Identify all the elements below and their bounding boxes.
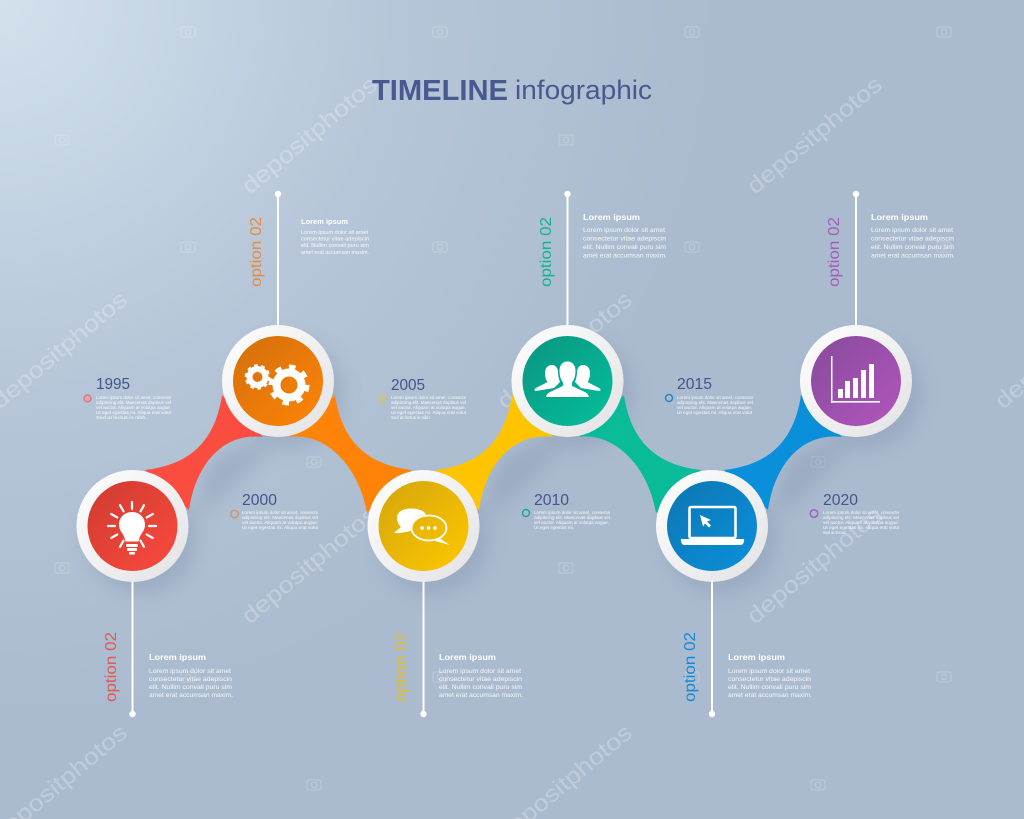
text block: top 3: Lorem ipsum — [871, 212, 928, 222]
text block: top 1: consectetur vitae adepiscin — [301, 236, 369, 242]
year block: 2005: 2005 — [391, 377, 425, 394]
option labels: option 02 — [826, 217, 843, 287]
text block: top 1: Lorem ipsum dolor sit amet — [301, 230, 368, 236]
icon: gears — [246, 366, 307, 403]
year block: 2005: Lorem ipsum dolor sit amet, consecte — [391, 395, 466, 401]
year block: 1995: Ut eget egestas mi. Aliqua erat volut — [96, 410, 172, 416]
text block: bottom 3: consectetur vitae adepiscin — [728, 676, 811, 683]
option labels: option 02 — [538, 217, 555, 287]
year block: 2000: Ut eget egestas mi. Aliqua erat volut — [242, 525, 319, 531]
option labels: option 02 — [248, 217, 265, 287]
shadows — [86, 337, 922, 594]
year block: 2005: Sed at lectus in nibh. — [391, 415, 431, 421]
year block: 1995: adipiscing elit. Maecenas dapibus vel — [96, 400, 171, 406]
year block: 2000: adipiscing elit. Maecenas dapibus vel — [242, 515, 318, 521]
icon: people — [534, 361, 600, 398]
year block: 1995 — [84, 376, 172, 421]
year block: 2015: Lorem ipsum dolor sit amet, consecte — [677, 395, 753, 401]
node 6: bar chart — [800, 325, 912, 437]
year block: 2015 — [666, 376, 753, 416]
year block: 2010: adipiscing elit. Maecenas dapibus vel — [534, 515, 610, 521]
connector: teal — [579, 395, 701, 513]
year block: 2005: adipiscing elit. Maecenas dapibus vel — [391, 400, 466, 406]
year block: 2010 — [522, 492, 610, 531]
year block: 2010: vel auctor. Aliquam at volutpa augue. — [534, 520, 609, 526]
year block: 1995: 1995 — [96, 376, 130, 393]
year block: 1995: Sed at lectus in nibh. — [96, 415, 147, 421]
year block: 2000 — [231, 492, 319, 531]
connector: orange — [290, 395, 412, 513]
year block: 2010: Ut eget egestas mi. — [534, 525, 574, 531]
year block: 2005 — [377, 377, 467, 421]
text block: bottom 1: elit. Nullim convali puru sim — [149, 684, 233, 691]
icon: bar chart — [831, 356, 880, 403]
text block: top 3: Lorem ipsum dolor sit amet — [871, 227, 953, 234]
text block: bottom 3: Lorem ipsum dolor sit amet — [728, 668, 810, 675]
text block: bottom 2: Lorem ipsum — [439, 652, 496, 662]
text block: bottom 1 — [149, 652, 233, 699]
text block: bottom 1: consectetur vitae adepiscin — [149, 676, 232, 683]
text block: top 1: elit. Nullim convali puru sim — [301, 243, 369, 249]
text block: bottom 3: elit. Nullim convali puru sim — [728, 684, 812, 691]
text block: top 2: Lorem ipsum — [583, 212, 640, 222]
year block: 1995: Lorem ipsum dolor sit amet, consecte — [96, 395, 171, 401]
watermarks: depositphotos — [742, 71, 887, 199]
option labels: option 02 — [393, 632, 410, 702]
year block: 2010: Lorem ipsum dolor sit amet, consecte — [534, 510, 610, 516]
text block: top 3: elit. Nullim convali puru sim — [871, 244, 955, 251]
text block: top 2: consectetur vitae adepiscin — [583, 236, 666, 242]
year block: 2005: Ut eget egestas mi. Aliqua erat volut — [391, 410, 467, 416]
text block: bottom 1: amet erat accumsan maxim. — [149, 692, 233, 699]
year block: 2000: Lorem ipsum dolor sit amet, consecte — [242, 510, 318, 516]
text block: top 3: consectetur vitae adepiscin — [871, 236, 954, 242]
year block: 2020: Ut eget egestas mi. Aliqua erat volut — [823, 525, 900, 531]
year block: 2020: 2020 — [823, 492, 858, 509]
text block: bottom 3 — [728, 652, 812, 699]
watermarks: depositphotos — [742, 501, 887, 629]
text block: bottom 1: Lorem ipsum dolor sit amet — [149, 668, 231, 675]
text block: top 3: amet erat accumsan maxim. — [871, 252, 955, 260]
node 4: people — [512, 325, 624, 437]
year block: 2020 — [810, 492, 900, 536]
year block: 2005: vel auctor. Aliquam at volutpa augue. — [391, 405, 466, 411]
watermarks: depositphotos — [492, 286, 637, 414]
connector: blue — [724, 395, 842, 510]
option labels: option 02 — [682, 632, 699, 702]
title: infographic — [515, 75, 652, 105]
connector: yellow — [435, 395, 553, 510]
icon: laptop — [681, 507, 744, 545]
year block: 2020: Lorem ipsum dolor sit amet, consecte — [823, 510, 899, 516]
year block: 2000: 2000 — [242, 492, 277, 509]
year block: 2015: Ut eget egestas mi. Aliqua erat volut — [677, 410, 753, 416]
icon: chat bubbles — [394, 508, 450, 545]
node 2: gears — [222, 325, 334, 437]
text block: top 3 — [871, 212, 955, 260]
connector: red — [145, 395, 263, 510]
node 3: chat bubbles — [368, 470, 480, 582]
title — [372, 75, 652, 107]
text block: top 2: elit. Nullim convali puru sim — [583, 244, 667, 251]
title: TIMELINE — [372, 75, 508, 107]
year block: 1995: vel auctor. Aliquam at volutpa augue. — [96, 405, 171, 411]
year block: 2015: 2015 — [677, 376, 712, 393]
text block: bottom 1: Lorem ipsum — [149, 652, 206, 662]
text block: top 2: Lorem ipsum dolor sit amet — [583, 227, 665, 234]
icon: light bulb — [108, 502, 156, 554]
text block: bottom 2: amet erat accumsan maxim. — [439, 692, 523, 699]
text block: bottom 2: Lorem ipsum dolor sit amet — [439, 668, 521, 675]
node 5: laptop — [656, 470, 768, 582]
text block: top 1 — [301, 217, 369, 256]
year block: 2020: Sed at lectus. — [823, 530, 847, 536]
watermarks: depositphotos — [237, 71, 382, 199]
text block: top 1: amet erat accumsan maxim. — [301, 250, 369, 256]
text block: bottom 3: Lorem ipsum — [728, 652, 785, 662]
option labels — [103, 217, 843, 702]
year block: 2015: adipiscing elit. Maecenas dapibus vel — [677, 400, 753, 406]
year block: 2020: vel auctor. Aliquam at volutpa augue. — [823, 520, 899, 526]
node 1: light bulb — [76, 470, 188, 582]
year block: 2015: vel auctor. Aliquam at volutpa augue. — [677, 405, 752, 411]
text block: bottom 3: amet erat accumsan maxim. — [728, 692, 812, 699]
stem lines — [129, 191, 859, 717]
text block: top 2 — [583, 212, 667, 260]
text block: bottom 2: elit. Nullim convali puru sim — [439, 684, 523, 691]
text block: top 2: amet erat accumsan maxim. — [583, 252, 667, 260]
year block: 2020: adipiscing elit. Maecenas dapibus vel — [823, 515, 899, 521]
option labels: option 02 — [103, 632, 120, 702]
text block: bottom 2: consectetur vitae adepiscin — [439, 676, 522, 683]
text block: bottom 2 — [439, 652, 523, 699]
text block: top 1: Lorem ipsum — [301, 217, 348, 226]
year block: 2010: 2010 — [534, 492, 569, 509]
watermarks: depositphotos — [237, 501, 382, 629]
year block: 2000: vel auctor. Aliquam at volutpa augue. — [242, 520, 318, 526]
